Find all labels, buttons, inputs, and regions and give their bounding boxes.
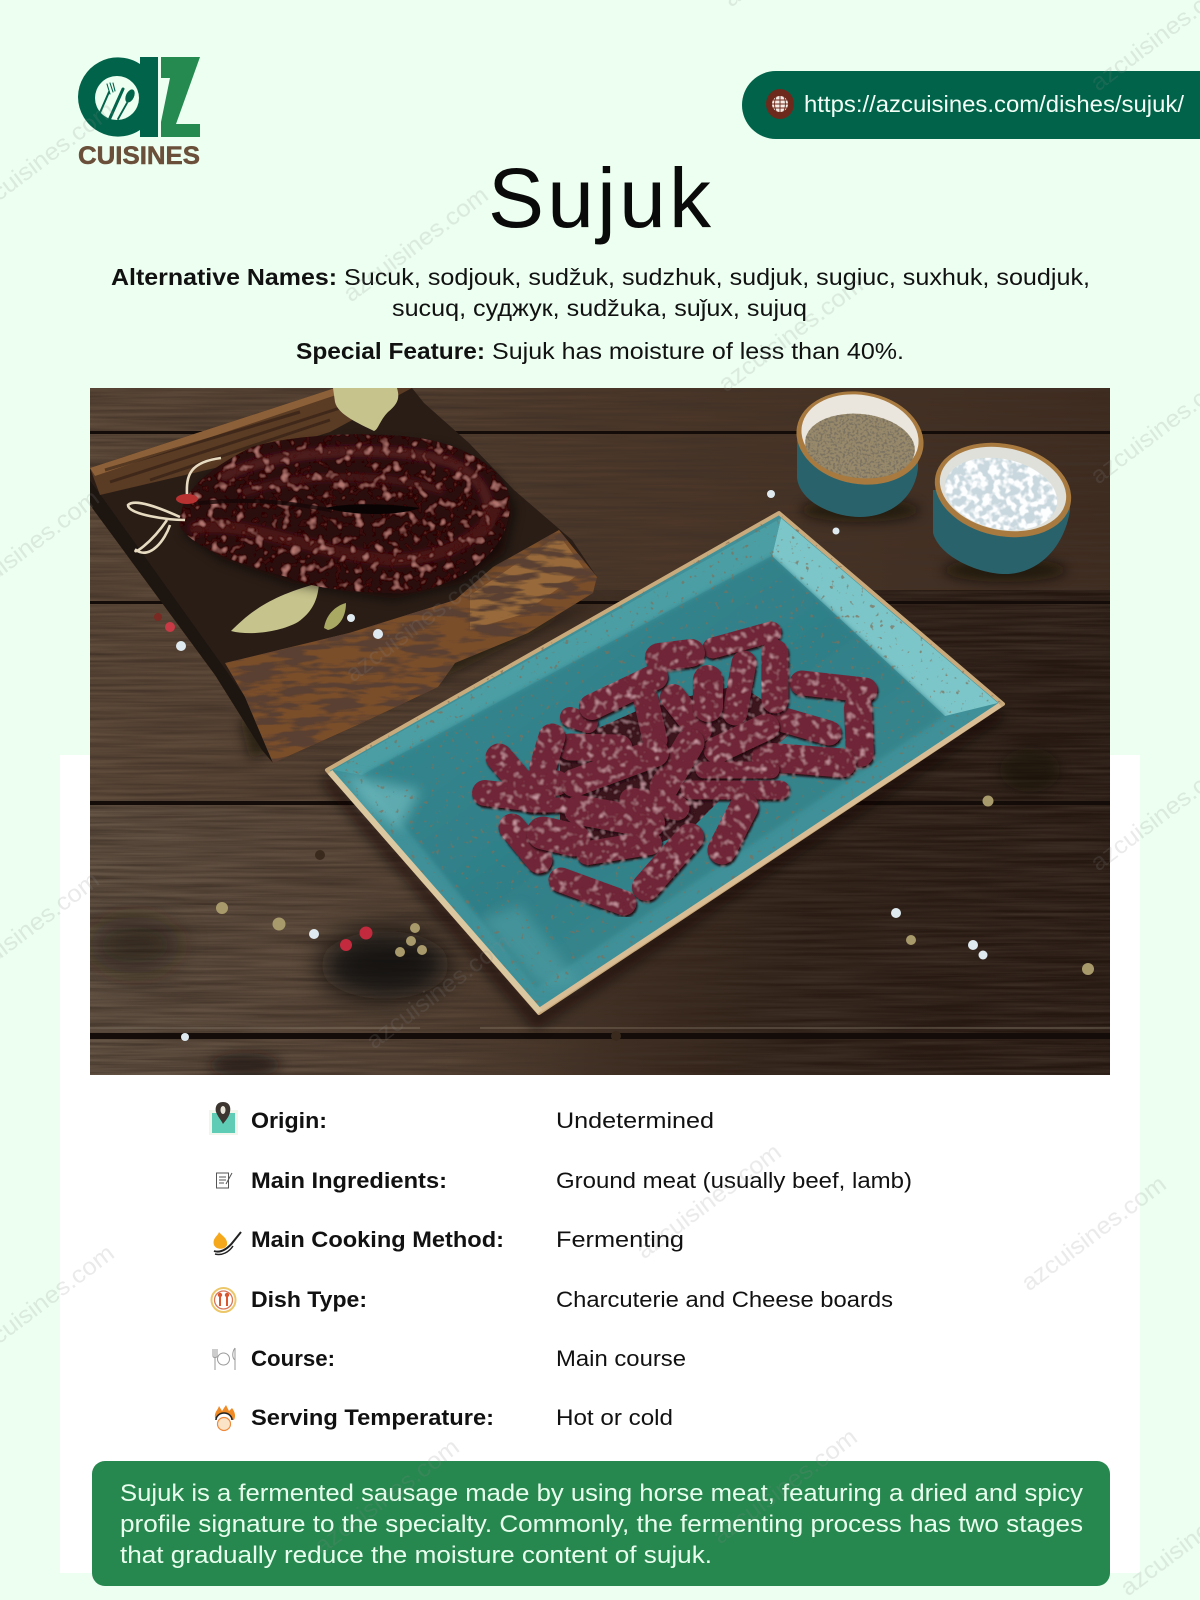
- salt bowl: [933, 442, 1072, 574]
- row: origin: Origin:: [251, 1108, 327, 1133]
- details table: [209, 1102, 912, 1430]
- description text: Sujuk is a fermented sausage made by using horse meat, featuring a dried and spicy: [120, 1480, 1084, 1507]
- bay leaves: [231, 388, 398, 633]
- title: Sujuk: [488, 151, 712, 245]
- board front bark: [225, 530, 597, 763]
- row: main cooking method: Main Cooking Method:: [251, 1227, 504, 1252]
- logo plate disc: [95, 76, 139, 120]
- description text: profile signature to the specialty. Commonly, the fermenting process has two stages: [120, 1511, 1083, 1538]
- board dark face: [90, 388, 597, 763]
- cutting board: [90, 388, 600, 763]
- string loops and tie: [128, 458, 221, 553]
- special feature: [296, 338, 904, 364]
- row: dish type: [212, 1287, 893, 1312]
- row: origin: [209, 1102, 714, 1135]
- url pill: [742, 71, 1200, 139]
- watermarks: azcuisines.com: [361, 929, 517, 1055]
- logo letter z: [161, 57, 200, 137]
- icon: globe: [766, 89, 794, 119]
- special feature: Special Feature:: [296, 338, 485, 364]
- row: dish type: Dish Type:: [251, 1287, 367, 1312]
- row: serving temperature: [215, 1405, 673, 1430]
- watermarks: azcuisines.com: [631, 1139, 787, 1265]
- row: main ingredients: Main Ingredients:: [251, 1168, 447, 1193]
- icon: plate with utensils: [212, 1288, 236, 1312]
- board top wood band: [90, 388, 412, 495]
- logo cutlery: [99, 83, 137, 119]
- peppercorns and salt: [154, 490, 1094, 1041]
- row: course: Course:: [251, 1346, 335, 1371]
- row: main cooking method: [214, 1227, 684, 1255]
- photo: sujuk on wooden table: [90, 382, 1110, 1077]
- row: main ingredients: Ground meat (usually beef, lamb): [556, 1168, 912, 1193]
- wooden table: [90, 388, 1110, 1077]
- sausage centre gap: [200, 501, 330, 510]
- alternative names: sucuq, суджук, sudžuka, suǰux, sujuq: [392, 295, 807, 321]
- turquoise plate: [325, 513, 1003, 1021]
- plate well: [362, 556, 945, 988]
- plate body: [327, 513, 1003, 1013]
- white details panel: [60, 755, 1140, 1573]
- alternative names: Sucuk, sodjouk, sudžuk, sudzhuk, sudjuk, sugiuc, suxhuk, soudjuk,: [344, 264, 1090, 290]
- watermarks: azcuisines.com: [338, 182, 494, 308]
- watermarks: azcuisines.com: [340, 562, 496, 688]
- row: origin: Undetermined: [556, 1108, 714, 1133]
- url text: https://azcuisines.com/dishes/sujuk/: [804, 91, 1185, 117]
- alternative names: [111, 264, 1090, 321]
- board left side: [90, 480, 273, 763]
- row: main ingredients: [216, 1168, 912, 1193]
- row: serving temperature: Hot or cold: [556, 1405, 673, 1430]
- icon: map pin: [209, 1102, 238, 1135]
- icon: fork plate knife: [213, 1348, 235, 1370]
- row: course: [213, 1346, 686, 1371]
- pepper and salt bowls: [789, 382, 1080, 582]
- watermarks: azcuisines.com: [707, 1424, 863, 1550]
- logo: AZ Cuisines: [78, 57, 200, 170]
- watermarks: azcuisines.com: [1016, 1171, 1172, 1297]
- slices cluster shadow: [560, 688, 789, 842]
- alternative names: Alternative Names:: [111, 264, 337, 290]
- row: course: Main course: [556, 1346, 686, 1371]
- special feature: Sujuk has moisture of less than 40%.: [492, 338, 904, 364]
- logo letter a: [78, 57, 158, 137]
- row: main cooking method: Fermenting: [556, 1227, 684, 1252]
- description callout: [92, 1461, 1110, 1586]
- description text: that gradually reduce the moisture content of sujuk.: [120, 1542, 712, 1569]
- pepper bowl: [796, 391, 924, 517]
- description text: [120, 1480, 1084, 1569]
- icon: flaming pan: [214, 1232, 241, 1255]
- watermarks: azcuisines.com: [309, 1434, 465, 1560]
- watermarks: azcuisines.com: [713, 272, 869, 398]
- row: dish type: Charcuterie and Cheese boards: [556, 1287, 893, 1312]
- dried sausage slices: [485, 632, 865, 903]
- logo wordmark: CUISINES: [78, 142, 200, 170]
- plate top-right rim: [772, 518, 998, 716]
- row: serving temperature: Serving Temperature:: [251, 1405, 494, 1430]
- icon: notepad: [216, 1173, 232, 1188]
- icon: flame thermometer: [215, 1405, 235, 1430]
- whole sausage ring: [128, 434, 514, 599]
